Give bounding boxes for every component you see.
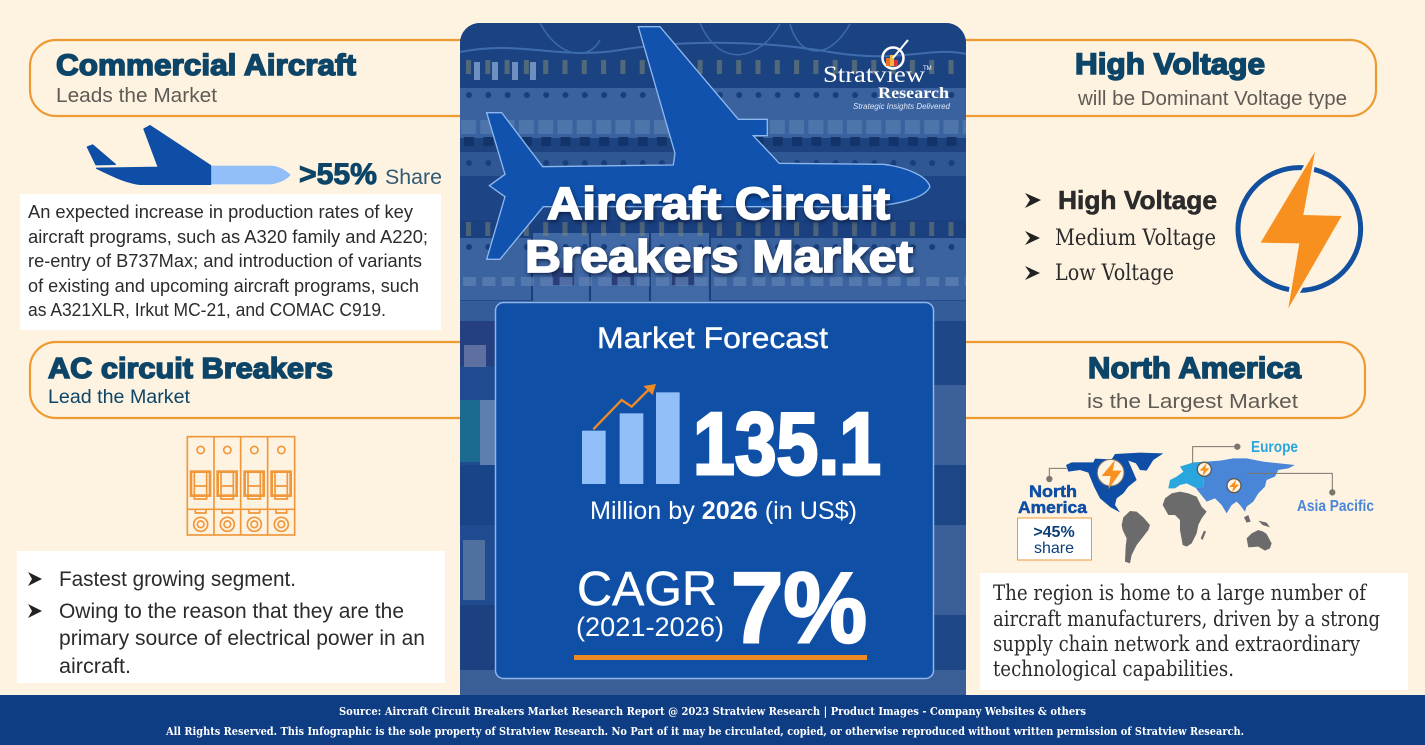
- callout: 45 percent share: [1018, 518, 1092, 560]
- map labels: America: [1018, 498, 1088, 517]
- map: africa: [1163, 492, 1207, 547]
- text block: AC breakers bullets: primary source of electrical power in an: [59, 627, 425, 650]
- callout: 45 percent share: share: [1034, 540, 1074, 557]
- label: forecast period: (2021-2026): [576, 612, 724, 642]
- map: indonesia islands: [1244, 515, 1270, 527]
- text block: AC breakers bullets: [17, 551, 445, 683]
- map: madagascar: [1201, 531, 1206, 540]
- world map: [1047, 444, 1335, 563]
- stat: 55 percent share: [299, 158, 442, 191]
- logo: stratview research: [823, 40, 951, 111]
- logo: stratview research: Stratview: [823, 62, 925, 87]
- list: voltage types: Medium Voltage: [1055, 226, 1216, 251]
- stat: 55 percent share: Share: [385, 166, 442, 189]
- text block: north america description: [980, 573, 1408, 690]
- icon: small aircraft share bar: [87, 126, 291, 184]
- subheading: leads the market: Leads the Market: [56, 85, 217, 107]
- chart icon: rising bars with arrow: [582, 384, 680, 484]
- map labels: [1018, 439, 1374, 517]
- title: Aircraft Circuit: [547, 178, 890, 229]
- logo: stratview research: TM: [923, 66, 932, 72]
- icon: lightning bolt in circle: [1238, 152, 1361, 308]
- icon: circuit breaker block: [187, 437, 295, 535]
- heading: market forecast: Market Forecast: [597, 322, 829, 355]
- rights line: All Rights Reserved. This Infographic is the sole property of Stratview Research. No Part of it may be circulated, copied, or otherwise reproduced without written permission of Stratview Research.: [165, 725, 1244, 738]
- text block: commercial aircraft description: re-entry of B737Max; and introduction of variants: [28, 251, 422, 271]
- photo-like electrical panel backdrop: [460, 23, 966, 695]
- subheading: largest market: is the Largest Market: [1087, 391, 1298, 413]
- panel: commercial aircraft header: [30, 40, 470, 116]
- text block: commercial aircraft description: of existing and upcoming aircraft programs, such: [28, 276, 419, 296]
- panel: high voltage header: [956, 40, 1376, 116]
- map: australia: [1247, 530, 1272, 551]
- map: europe: [1168, 462, 1207, 488]
- map: asia: [1196, 458, 1295, 513]
- text block: commercial aircraft description: as A321XLR, Irkut MC-21, and COMAC C919.: [28, 300, 386, 320]
- logo: stratview research: Research: [878, 85, 949, 102]
- icon: asia bolt marker: [1227, 479, 1241, 493]
- map labels: Asia Pacific: [1297, 498, 1374, 515]
- heading: commercial aircraft: Commercial Aircraft: [56, 49, 356, 82]
- text block: AC breakers bullets: aircraft.: [59, 655, 131, 678]
- map: south america: [1122, 511, 1150, 563]
- panel: market forecast: [496, 302, 934, 678]
- heading: AC circuit breakers: AC circuit Breakers: [48, 353, 333, 385]
- list: voltage types: [1025, 185, 1217, 286]
- stat: 7 percent: 7%: [731, 552, 867, 664]
- heading: north america: North America: [1088, 352, 1301, 385]
- footer band: [0, 695, 1425, 745]
- text block: north america description: The region is home to a large number of: [993, 581, 1368, 605]
- list: voltage types: High Voltage: [1058, 185, 1217, 215]
- panel: AC circuit breakers header: [30, 342, 470, 418]
- label: CAGR: CAGR: [577, 563, 717, 616]
- icon: large aircraft silhouette: [487, 27, 930, 259]
- text block: AC breakers bullets: Owing to the reason that they are the: [59, 600, 404, 623]
- map labels: Europe: [1251, 439, 1298, 456]
- callout: 45 percent share: >45%: [1033, 524, 1075, 541]
- text block: commercial aircraft description: aircraft programs, such as A320 family and A220;: [28, 227, 428, 247]
- panel: north america header: [956, 342, 1365, 418]
- callout lines: [1047, 444, 1335, 495]
- decorative orange rule: [574, 655, 867, 660]
- subheading: dominant voltage type: will be Dominant Voltage type: [1077, 88, 1347, 110]
- heading: high voltage: High Voltage: [1075, 48, 1265, 81]
- icon: north america bolt marker: [1097, 459, 1124, 489]
- text block: north america description: technological capabilities.: [993, 657, 1234, 681]
- title: Breakers Market: [525, 231, 913, 282]
- text block: commercial aircraft description: [20, 194, 441, 330]
- text block: north america description: supply chain network and extraordinary: [993, 632, 1360, 656]
- map: north america: [1066, 453, 1163, 512]
- source line: Source: Aircraft Circuit Breakers Market Research Report @ 2023 Stratview Research | Product Images - Company Websites & others: [339, 705, 1086, 718]
- list: voltage types: Low Voltage: [1055, 261, 1174, 286]
- panel: central market column: [460, 23, 966, 695]
- logo: stratview research: Strategic Insights Delivered: [853, 102, 951, 111]
- subheading: lead the market: Lead the Market: [48, 387, 191, 408]
- text block: commercial aircraft description: An expected increase in production rates of key: [28, 202, 413, 222]
- stat: 55 percent share: >55%: [299, 158, 377, 191]
- text block: AC breakers bullets: Fastest growing segment.: [59, 568, 296, 591]
- title: [525, 178, 913, 282]
- text: million by 2026: Million by 2026 (in US$): [590, 497, 857, 525]
- stat: 135.1: 135.1: [693, 394, 881, 493]
- icon: europe bolt marker: [1197, 462, 1211, 476]
- map labels: North: [1029, 482, 1077, 501]
